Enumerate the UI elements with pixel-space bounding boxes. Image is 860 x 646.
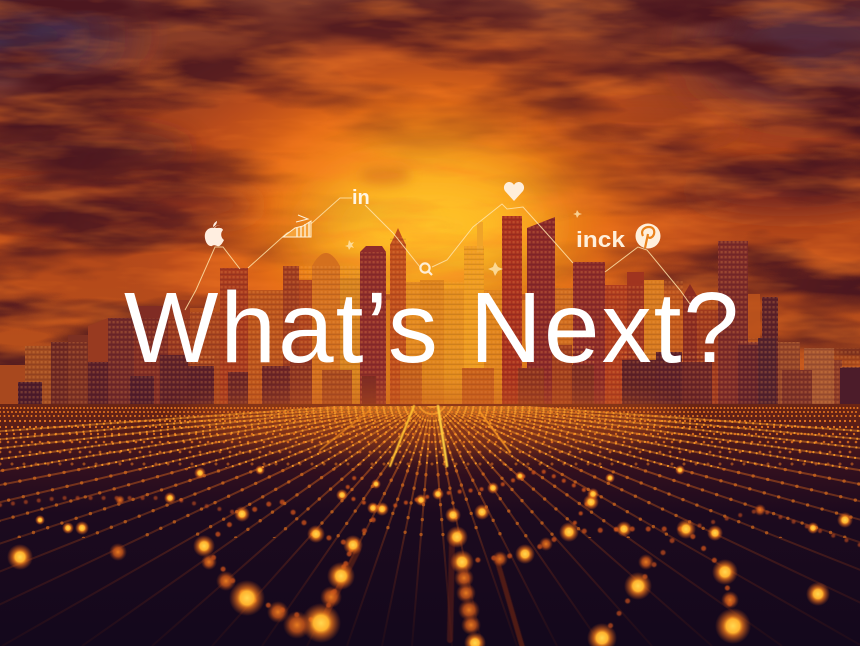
network nodes <box>7 465 853 646</box>
foreground towers <box>18 338 860 408</box>
trend line <box>185 198 690 310</box>
far field horizontal rows of lights <box>0 408 860 464</box>
sunset sky background <box>0 0 860 410</box>
network wires <box>0 470 860 638</box>
faint converging streaks <box>0 400 860 646</box>
icon: heart <box>504 182 524 201</box>
background towers <box>0 216 860 407</box>
medium dots <box>0 468 860 538</box>
clouds <box>0 0 860 410</box>
fine dots far field <box>0 406 859 468</box>
city skyline <box>0 216 860 408</box>
social icons and trend line <box>185 182 690 310</box>
bright central streaks <box>318 406 522 646</box>
glowing data grid ground <box>0 390 860 646</box>
filler haze of distant towers <box>95 294 760 406</box>
icon: apple <box>205 221 224 246</box>
icon: magnifier <box>420 263 432 275</box>
icon: rising chart <box>283 215 311 237</box>
inck label: inck <box>576 227 626 252</box>
icon: linkedin in: in <box>352 187 370 209</box>
title: What’s Next? <box>124 272 739 384</box>
sparkles <box>345 210 582 276</box>
icon: pinterest <box>636 224 660 248</box>
window pattern <box>25 216 860 406</box>
